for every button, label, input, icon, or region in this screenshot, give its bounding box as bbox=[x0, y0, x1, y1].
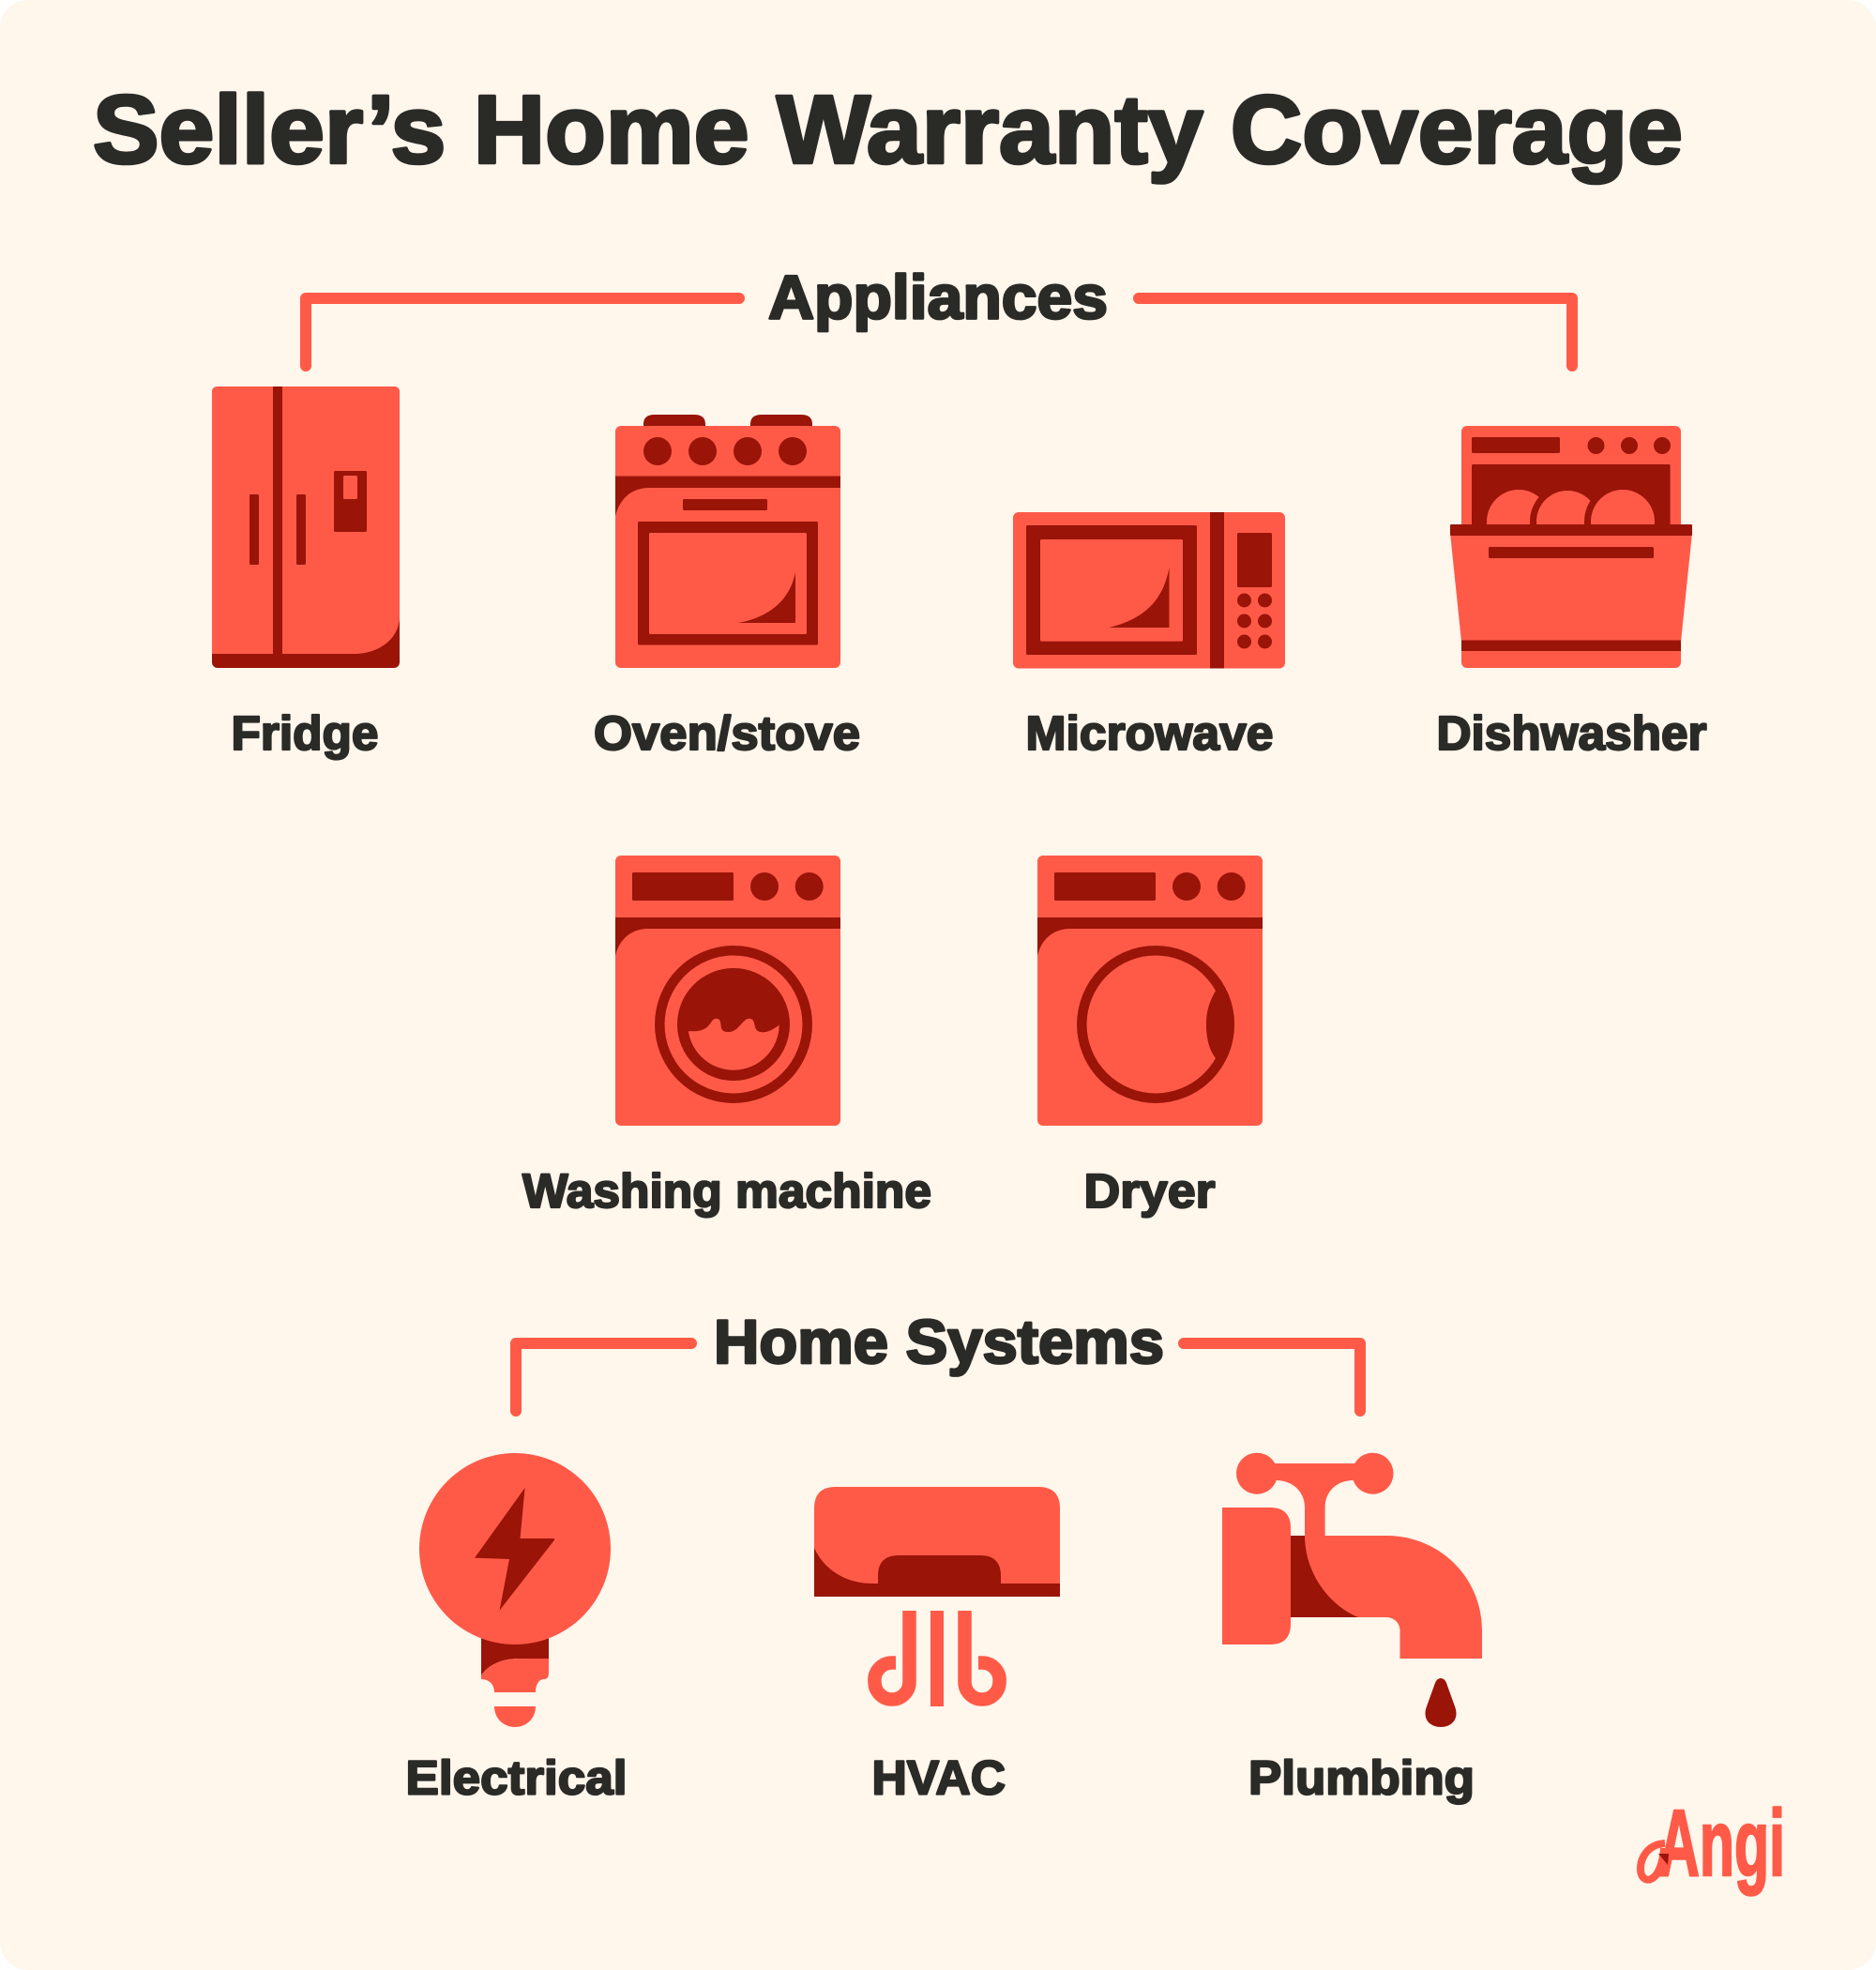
label: Oven/stove: Oven/stove bbox=[594, 706, 860, 760]
icon: electrical bulb bbox=[419, 1453, 611, 1727]
heading: Home Systems: Home Systems bbox=[714, 1307, 1164, 1376]
bracket: Home Systems right bbox=[1184, 1343, 1360, 1411]
bracket: Appliances right bbox=[1139, 298, 1572, 366]
label: Plumbing: Plumbing bbox=[1248, 1750, 1475, 1805]
icon: HVAC bbox=[814, 1487, 1060, 1706]
label: Electrical: Electrical bbox=[405, 1750, 627, 1805]
label: Fridge: Fridge bbox=[231, 706, 379, 760]
logo: Angi: Angi bbox=[1658, 1791, 1785, 1896]
icon: plumbing faucet bbox=[1222, 1453, 1482, 1727]
logo: Angi bbox=[1641, 1791, 1785, 1896]
title: Seller’s Home Warranty Coverage bbox=[93, 75, 1683, 184]
icon: dryer bbox=[1037, 856, 1263, 1126]
icon: dishwasher bbox=[1450, 426, 1692, 668]
label: HVAC: HVAC bbox=[872, 1750, 1006, 1805]
icon: oven and stove bbox=[615, 415, 840, 668]
icon: fridge bbox=[212, 386, 400, 668]
heading: Appliances: Appliances bbox=[768, 263, 1108, 332]
label: Dishwasher: Dishwasher bbox=[1437, 706, 1707, 760]
label: Dryer: Dryer bbox=[1084, 1164, 1216, 1218]
bracket: Appliances left bbox=[306, 298, 739, 366]
label: Washing machine: Washing machine bbox=[522, 1164, 931, 1218]
bracket: Home Systems left bbox=[516, 1343, 691, 1411]
icon: washing machine bbox=[615, 856, 840, 1126]
icon: microwave bbox=[1013, 512, 1285, 668]
label: Microwave: Microwave bbox=[1026, 706, 1274, 760]
